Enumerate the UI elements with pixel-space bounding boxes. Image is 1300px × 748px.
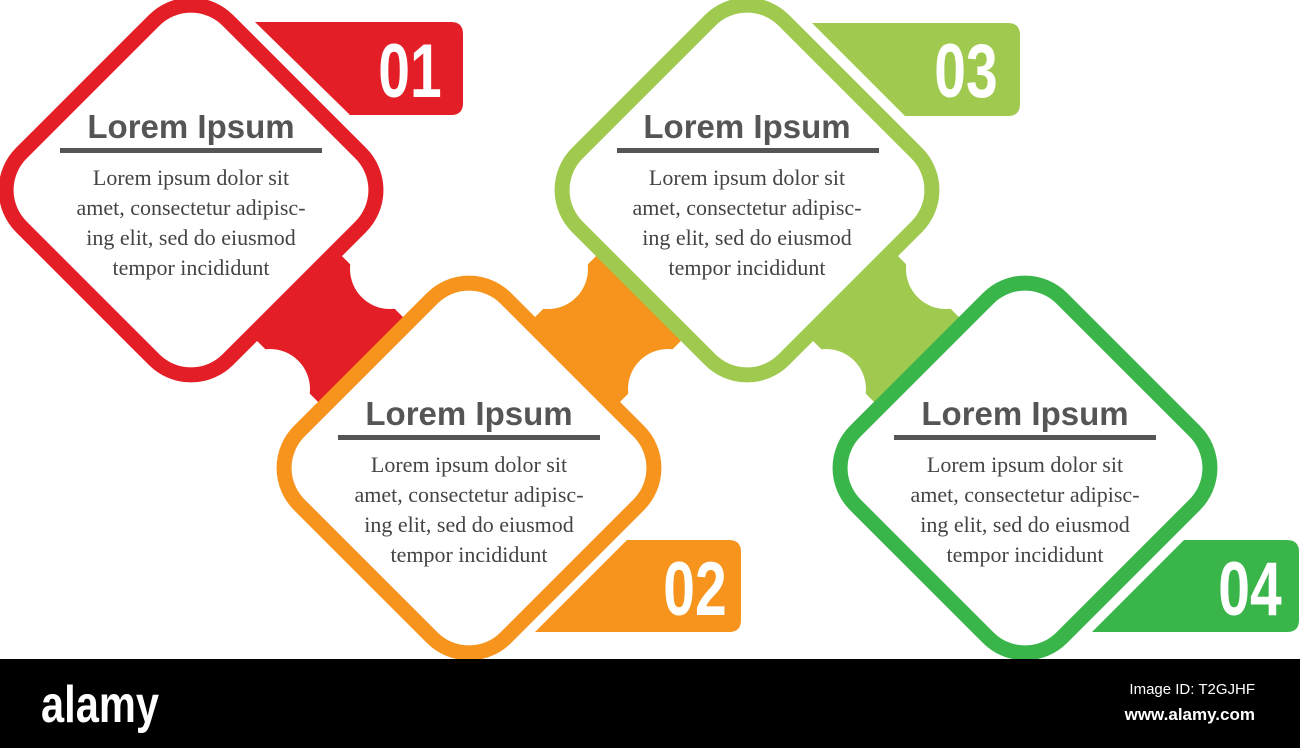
- tab 01: 01: [378, 29, 442, 114]
- text 1: amet, consectetur adipisc-: [76, 195, 306, 220]
- text 1: tempor incididunt: [112, 255, 270, 280]
- tab 03: 03: [934, 29, 998, 114]
- text 4: tempor incididunt: [946, 542, 1104, 567]
- text 3: amet, consectetur adipisc-: [632, 195, 862, 220]
- heading 1: Lorem Ipsum: [87, 108, 295, 145]
- tab 04: 04: [1218, 547, 1282, 632]
- heading 4: Lorem Ipsum: [921, 395, 1129, 432]
- text 2: Lorem ipsum dolor sit: [371, 452, 567, 477]
- text 3: ing elit, sed do eiusmod: [642, 225, 852, 250]
- panel: step 2: [263, 262, 675, 674]
- text 4: amet, consectetur adipisc-: [910, 482, 1140, 507]
- tab 03: [812, 23, 1020, 116]
- text 2: amet, consectetur adipisc-: [354, 482, 584, 507]
- tab 01: [255, 22, 463, 115]
- tab 04: [1092, 540, 1299, 632]
- text 3: tempor incididunt: [668, 255, 826, 280]
- footer id: Image ID: T2GJHF: [1129, 681, 1255, 698]
- heading 2: Lorem Ipsum: [365, 395, 573, 432]
- text 2: tempor incididunt: [390, 542, 548, 567]
- footer url: www.alamy.com: [1124, 705, 1255, 724]
- panel: step 4: [819, 262, 1231, 674]
- connector: orange 2-3: [508, 229, 708, 429]
- tab 02: [535, 540, 741, 632]
- heading 3: Lorem Ipsum: [643, 108, 851, 145]
- panel: step 3: [541, 0, 953, 396]
- footer logo: alamy: [41, 675, 159, 733]
- text 1: Lorem ipsum dolor sit: [93, 165, 289, 190]
- text 4: ing elit, sed do eiusmod: [920, 512, 1130, 537]
- tab 02: 02: [663, 547, 727, 632]
- panel: step 1: [0, 0, 397, 396]
- text 1: ing elit, sed do eiusmod: [86, 225, 296, 250]
- text 3: Lorem ipsum dolor sit: [649, 165, 845, 190]
- connector: light green 3-4: [786, 229, 986, 429]
- footer bar: [0, 659, 1300, 748]
- connector: red 1-2: [230, 229, 430, 429]
- text 2: ing elit, sed do eiusmod: [364, 512, 574, 537]
- text 4: Lorem ipsum dolor sit: [927, 452, 1123, 477]
